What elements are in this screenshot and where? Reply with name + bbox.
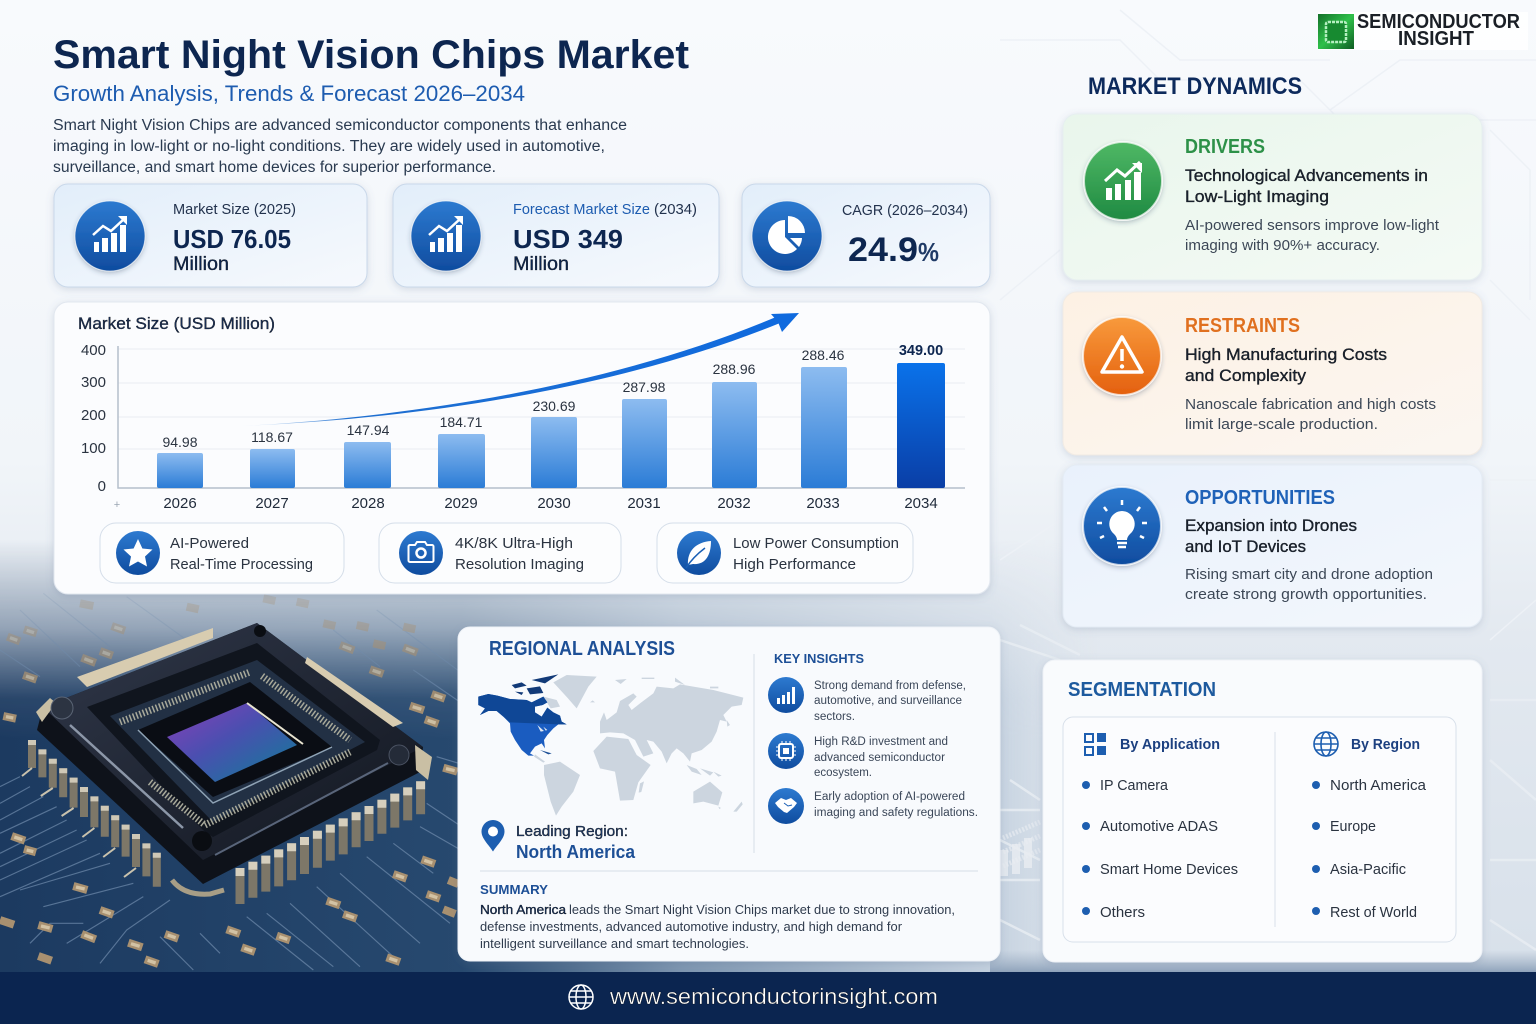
feature: low power: Low Power Consumption [733,535,899,552]
title: Smart Night Vision Chips Market [53,33,689,77]
summary: defense investments, advanced automotive industry, and high demand for [480,920,902,934]
insight: early adoption: Early adoption of AI-powered [814,791,965,803]
panel: restraints: Nanoscale fabrication and high costs [1185,396,1436,413]
summary: intelligent surveillance and smart technologies. [480,937,749,951]
bar chart: 287.98 [623,379,666,395]
feature: resolution imaging [379,523,621,583]
description: imaging in low-light or no-light conditions. They are widely used in automotive, [53,138,605,155]
KPI card: forecast market size 2034: (2034) [654,202,697,218]
feature: AI-powered [100,523,344,583]
bar chart: 2029 [444,495,478,512]
panel: restraints: RESTRAINTS [1185,315,1300,337]
bar chart: 2026 [163,495,197,512]
column: by application: IP Camera [1100,777,1169,794]
KPI card: market size 2025 [54,184,367,287]
column: by application: Automotive ADAS [1100,818,1218,835]
bar chart: 230.69 [533,398,576,414]
icon: growth chart [75,201,145,271]
KPI card: forecast market size 2034: Million [513,254,569,275]
KPI card: market size 2025: USD 76.05 [173,224,291,254]
logo [1318,11,1528,50]
column: by region [1312,732,1427,921]
background [0,524,1536,972]
feature: resolution imaging: Resolution Imaging [455,556,584,573]
panel: drivers: DRIVERS [1185,136,1265,158]
panel: drivers: Technological Advancements in [1185,167,1428,185]
column: by region: Europe [1330,818,1376,835]
feature: resolution imaging: 4K/8K Ultra-High [455,535,573,552]
bar chart: 184.71 [440,414,483,430]
KPI card: CAGR: CAGR (2026–2034) [842,203,968,219]
chip body [36,623,432,884]
key insights: KEY INSIGHTS [774,651,864,666]
bar chart: 2033 [806,495,840,512]
logo: SEMICONDUCTOR [1357,11,1521,33]
summary: North America [480,903,566,917]
icon: location pin [482,820,504,852]
world map [478,674,743,816]
bar chart: 2030 [537,495,571,512]
panel: drivers [1063,114,1482,280]
panel: drivers: AI-powered sensors improve low-light [1185,217,1440,234]
bar chart: 2031 [627,495,661,512]
column: by application: Others [1100,904,1145,921]
leading region: North America [516,842,636,862]
bar chart: 288.96 [713,361,756,377]
leading region: Leading Region: [516,823,628,840]
feature: AI-powered: Real-Time Processing [170,556,313,573]
icon: star [116,531,160,575]
insight: early adoption: imaging and safety regulations. [814,807,978,819]
column: by region: North America [1330,777,1427,794]
arrow: growth trend [240,313,799,426]
icon: globe [1314,732,1338,756]
summary: SUMMARY [480,882,548,897]
insight: R&D: advanced semiconductor [814,752,945,764]
icon: leaf [677,531,721,575]
feature: low power [657,523,913,583]
summary: leads the Smart Night Vision Chips market due to strong innovation, [569,903,955,917]
bar chart: 400 [81,342,106,359]
footer: www.semiconductorinsight.com [609,984,938,1009]
icon: globe [569,985,593,1009]
column: by region: By Region [1351,736,1420,753]
bar chart: 300 [81,374,106,391]
column: by application [1082,733,1238,921]
panel: restraints: and Complexity [1185,367,1307,385]
bar chart: 2032 [717,495,751,512]
logo: INSIGHT [1398,28,1474,50]
insight: R&D: ecosystem. [814,767,872,779]
feature: AI-powered: AI-Powered [170,535,249,552]
key insights [768,651,978,824]
insight: R&D: High R&D investment and [814,736,948,748]
insight: early adoption [768,788,978,824]
icon: grid squares [1085,733,1106,755]
panel: opportunities: create strong growth opportunities. [1185,586,1427,603]
icon: camera [399,531,443,575]
panel: opportunities: Rising smart city and drone adoption [1185,566,1433,583]
summary [480,882,955,951]
bar chart: 118.67 [251,429,293,445]
insight: strong demand: sectors. [814,711,855,723]
panel: opportunities [1063,465,1482,627]
panel: opportunities: OPPORTUNITIES [1185,487,1335,509]
bar chart: 2028 [351,495,385,512]
bar chart: 0 [98,478,106,495]
KPI card: forecast market size 2034 [393,184,719,287]
bar chart: 200 [81,407,106,424]
feature: low power: High Performance [733,556,856,573]
column: by region: Rest of World [1330,904,1417,921]
KPI card: CAGR: % [918,237,939,267]
subtitle: Growth Analysis, Trends & Forecast 2026–2034 [53,81,525,106]
insight: R&D [768,733,948,779]
KPI card: market size 2025: Million [173,254,229,275]
description: surveillance, and smart home devices for superior performance. [53,159,496,176]
description: Smart Night Vision Chips are advanced semiconductor components that enhance [53,117,627,134]
photo: circuit board with night vision chip [0,593,470,970]
KPI card: CAGR: 24.9 [848,231,918,269]
chart title: Market Size (USD Million) [78,314,275,333]
description [53,117,627,176]
bar chart: 147.94 [347,422,390,438]
KPI card: forecast market size 2034: USD 349 [513,224,623,254]
icon: warning [1083,317,1161,395]
chip pins [22,740,421,904]
panel: opportunities: and IoT Devices [1185,538,1306,556]
icon: growth chart [1084,142,1162,220]
heading: regional analysis: REGIONAL ANALYSIS [489,638,675,660]
insight: strong demand: Strong demand from defense, [814,680,966,692]
panel: drivers: imaging with 90%+ accuracy. [1185,237,1380,254]
panel: market size chart [54,302,990,594]
icon: growth chart [411,201,481,271]
leading region [516,823,636,862]
bar chart: 94.98 [162,434,198,450]
insight: strong demand [768,677,966,723]
KPI card: market size 2025: Market Size (2025) [173,202,296,218]
panel: restraints [1063,292,1482,455]
icon: light bulb [1083,487,1161,565]
bar chart: + [114,499,120,511]
bar chart: 100 [81,440,106,457]
column: by application: By Application [1120,736,1220,753]
bar chart: 288.46 [802,347,845,363]
bar chart [81,342,965,512]
panel: regional analysis [458,627,1000,961]
column: by application: Smart Home Devices [1100,861,1238,878]
KPI card: CAGR [742,184,990,287]
footer [0,972,1536,1024]
column: by region: Asia-Pacific [1330,861,1406,878]
heading: segmentation: SEGMENTATION [1068,679,1216,701]
panel: opportunities: Expansion into Drones [1185,517,1357,535]
insight: strong demand: automotive, and surveillance [814,695,962,707]
bar chart: 2034 [904,495,938,512]
panel: restraints: limit large-scale production. [1185,416,1378,433]
bar chart: 349.00 [899,343,943,359]
panel: restraints: High Manufacturing Costs [1185,346,1387,364]
icon: pie chart [752,201,822,271]
bar chart: 2027 [255,495,289,512]
panel: segmentation [1043,660,1482,962]
heading: market dynamics: MARKET DYNAMICS [1088,73,1302,100]
panel: drivers: Low-Light Imaging [1185,188,1329,206]
KPI card: forecast market size 2034: Forecast Market Size [513,202,650,218]
